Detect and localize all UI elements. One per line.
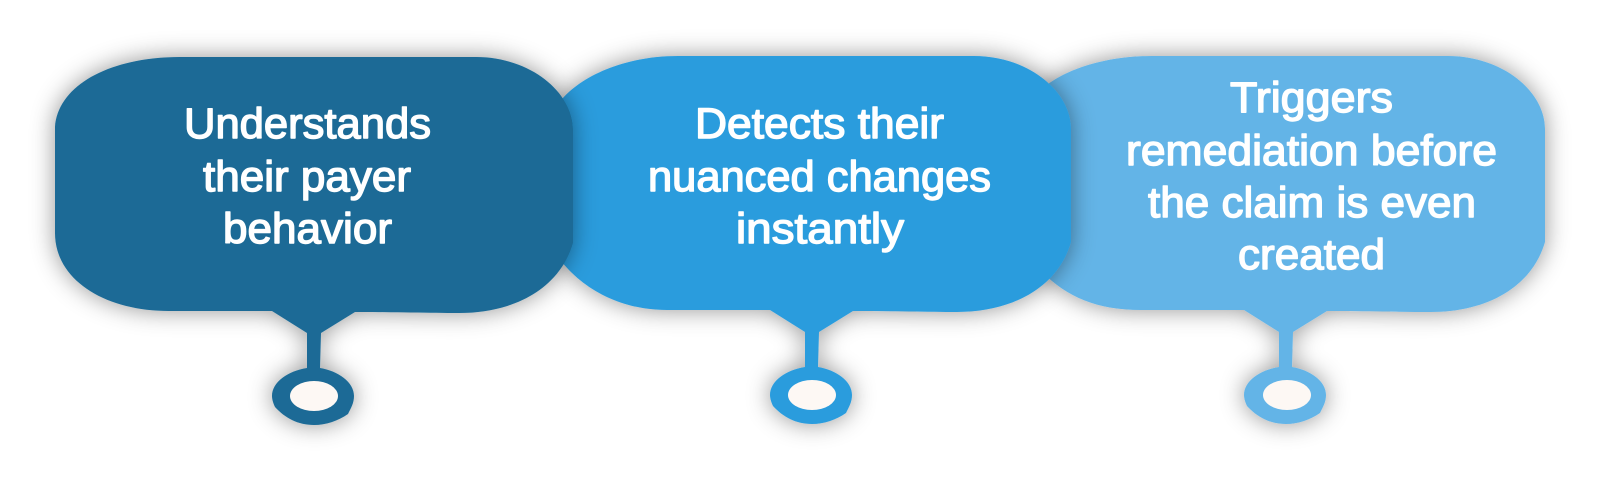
callout 1 text: their payer (203, 153, 411, 201)
callout 1 anchor dot (290, 381, 338, 411)
callout 3 text: the claim is even (1148, 179, 1476, 227)
callout 2 text: nuanced changes (648, 153, 991, 201)
panel: callout 3 triggers remediation (1032, 56, 1545, 424)
callout 2 text: Detects their (695, 100, 944, 148)
callout 2 bubble shape (548, 56, 1071, 424)
callout 3 text: created (1238, 231, 1385, 279)
callout 3 text (1126, 74, 1497, 279)
callout 3 bubble shape (1032, 56, 1545, 424)
callout 3 text: Triggers (1230, 74, 1393, 122)
callout 3 anchor dot (1263, 380, 1311, 410)
callout 1 text (184, 100, 431, 253)
callout 2 text: instantly (736, 205, 905, 253)
callout 1 text: behavior (223, 205, 392, 253)
callout 2 text (648, 100, 991, 253)
callout 1 bubble shape (55, 57, 573, 425)
panel: callout 2 detects changes (548, 56, 1071, 424)
callout 3 text: remediation before (1126, 127, 1497, 175)
panel: callout 1 understands behavior (55, 57, 573, 425)
callout 2 anchor dot (788, 380, 836, 410)
callout 1 text: Understands (184, 100, 431, 148)
